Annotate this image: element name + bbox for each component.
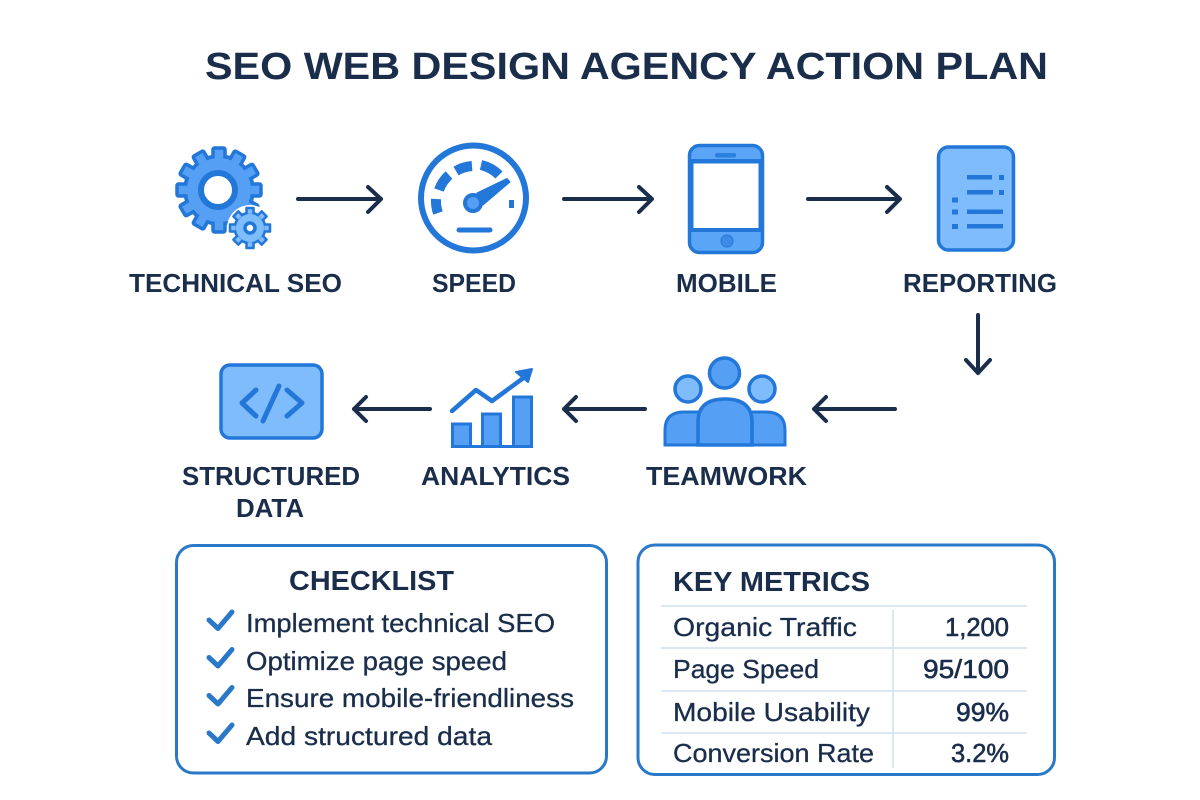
heading: key metrics: KEY METRICS xyxy=(673,566,870,597)
heading: checklist: CHECKLIST xyxy=(289,565,454,596)
checklist items: Ensure mobile-friendliness xyxy=(246,683,574,713)
panel: checklist xyxy=(176,546,606,773)
metrics table: 3.2% xyxy=(951,738,1009,768)
metrics table: 95/100 xyxy=(923,654,1009,684)
icon: speedometer xyxy=(421,146,526,250)
metrics table: 1,200 xyxy=(945,612,1009,642)
label: teamwork: TEAMWORK xyxy=(646,461,807,491)
label: structured data xyxy=(182,461,360,523)
arrow: teamwork to analytics xyxy=(564,397,645,421)
label: technical seo: TECHNICAL SEO xyxy=(129,268,342,298)
arrow: reporting down to teamwork xyxy=(966,315,990,373)
metrics table: 99% xyxy=(956,697,1009,727)
icon: mobile phone xyxy=(690,146,762,252)
arrow: analytics to structured data xyxy=(354,397,430,421)
label: mobile: MOBILE xyxy=(676,268,777,298)
arrow: speed to mobile xyxy=(564,187,652,212)
label: structured data: DATA xyxy=(236,493,304,523)
checklist items: Add structured data xyxy=(246,721,493,751)
checklist items: Implement technical SEO xyxy=(246,608,555,638)
label: analytics: ANALYTICS xyxy=(421,461,570,491)
arrow: reporting row to teamwork xyxy=(814,397,895,421)
panel: key metrics xyxy=(638,545,1054,774)
checklist items xyxy=(209,608,574,751)
icon: report document xyxy=(938,147,1014,250)
icon: analytics chart xyxy=(452,369,532,446)
icon: code window xyxy=(221,365,322,438)
arrow: technical seo to speed xyxy=(298,187,381,212)
checklist items: Optimize page speed xyxy=(246,646,507,676)
metrics table xyxy=(661,606,1027,768)
label: structured data: STRUCTURED xyxy=(182,461,360,491)
icon: team xyxy=(665,358,785,445)
metrics table: Page Speed xyxy=(673,654,819,684)
label: reporting: REPORTING xyxy=(903,268,1057,298)
label: speed: SPEED xyxy=(432,268,516,298)
metrics table: Conversion Rate xyxy=(673,738,874,768)
icon: gears xyxy=(177,148,273,251)
title: SEO WEB DESIGN AGENCY ACTION PLAN xyxy=(205,46,1048,88)
arrow: mobile to reporting xyxy=(808,187,900,212)
metrics table: Mobile Usability xyxy=(673,697,870,727)
metrics table: Organic Traffic xyxy=(673,612,857,642)
